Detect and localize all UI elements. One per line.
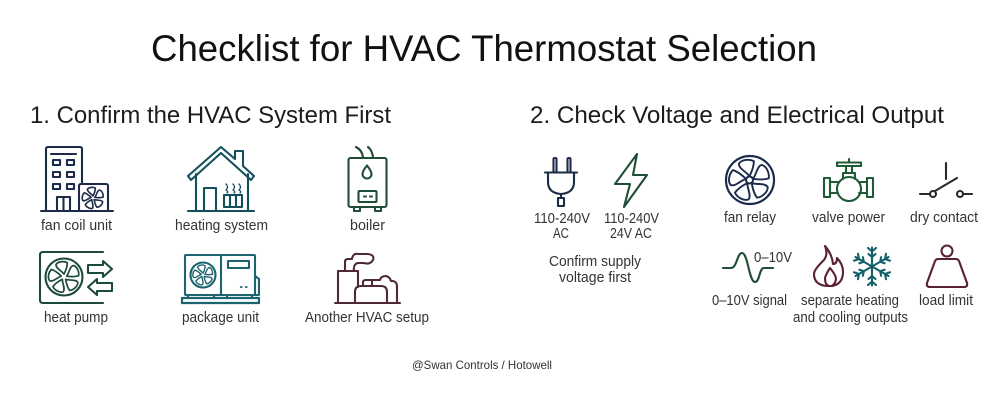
icon: boiler [348, 147, 386, 211]
label: heating system: heating system [175, 217, 268, 234]
icon: heating system [188, 147, 254, 211]
icon: flame [814, 246, 843, 286]
icon: plug [545, 158, 577, 206]
icon: another HVAC setup [335, 254, 400, 303]
label: separate heating and cooling outputs: and cooling outputs [793, 309, 908, 326]
label: heat pump: heat pump [44, 309, 108, 326]
icon: package unit [182, 255, 259, 303]
panel: confirm the HVAC system [30, 102, 429, 326]
icon: valve power [824, 159, 873, 201]
label: 0-10V signal: 0–10V signal [712, 292, 787, 309]
icon: fan relay [726, 156, 774, 204]
label: fan relay: fan relay [724, 209, 776, 226]
icon: load limit weight [927, 246, 967, 287]
label: wave 0-10V: 0–10V [754, 249, 792, 266]
note: confirm supply voltage first [549, 253, 641, 286]
icon: dry contact [920, 163, 972, 197]
panel: voltage and electrical output [530, 102, 979, 326]
note: confirm supply voltage first: voltage first [559, 269, 632, 286]
label: boiler: boiler [350, 217, 385, 234]
icon: heat pump [40, 252, 112, 303]
label: valve power: valve power [812, 209, 885, 226]
label: load limit: load limit [919, 292, 974, 309]
label: another HVAC setup: Another HVAC setup [305, 309, 429, 326]
icon: lightning bolt [615, 154, 647, 207]
label: fan coil unit: fan coil unit [41, 217, 113, 234]
label: separate heating and cooling outputs: separate heating [801, 292, 899, 309]
label: plug voltage: 110-240V [534, 210, 590, 227]
note: confirm supply voltage first: Confirm supply [549, 253, 641, 270]
heading: section 2: 2. Check Voltage and Electrical Output [530, 102, 944, 129]
icon: fan coil unit [41, 147, 113, 211]
icon: snowflake [854, 248, 890, 286]
label: package unit: package unit [182, 309, 260, 326]
label: bolt 24V AC: 24V AC [610, 225, 652, 242]
icon: 0-10V signal wave [723, 253, 773, 282]
label: dry contact: dry contact [910, 209, 979, 226]
label: bolt voltage: 110-240V [604, 210, 659, 227]
label: plug AC: AC [553, 225, 569, 242]
title: Checklist for HVAC Thermostat Selection [151, 28, 817, 69]
footer credit: @Swan Controls / Hotowell [412, 358, 552, 372]
label: separate heating and cooling outputs [793, 292, 908, 326]
heading: section 1: 1. Confirm the HVAC System First [30, 102, 391, 129]
